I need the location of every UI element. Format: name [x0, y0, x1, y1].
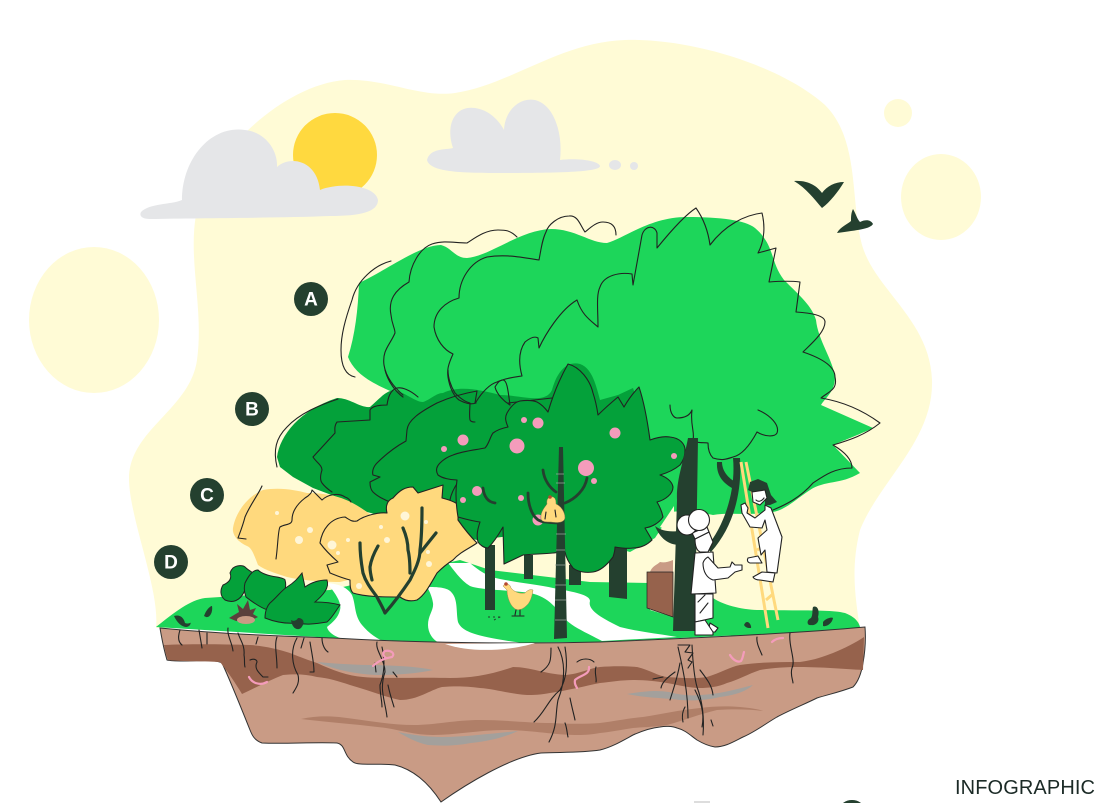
small pale blob: [884, 99, 912, 127]
peach tree: [437, 364, 685, 572]
bird two: [837, 209, 873, 233]
peach tree fruits: [441, 417, 677, 526]
label D: D: [164, 552, 178, 574]
cloud left: [140, 130, 378, 219]
label B: [235, 392, 269, 426]
label C: [190, 478, 224, 512]
left bushes: [221, 566, 340, 624]
label D: [154, 545, 188, 579]
dark green tree mass: [277, 363, 650, 540]
light green canopy: [348, 217, 873, 552]
soil grey veins: [317, 662, 753, 746]
yellow bush blossoms: [275, 511, 432, 589]
label B: B: [245, 400, 259, 420]
background blob: [129, 40, 932, 630]
ground hen: [503, 582, 533, 616]
label A: A: [304, 290, 318, 310]
cloud puff small: [630, 162, 638, 170]
label C: C: [200, 486, 214, 506]
chef: [677, 510, 742, 635]
yellow bush branches: [360, 508, 436, 613]
cropped grey marker: [694, 801, 710, 803]
white path left: [327, 583, 385, 642]
ground leaves: [174, 606, 833, 629]
left pale blob: [29, 247, 159, 393]
yellow front bush: [320, 485, 477, 601]
yellow back bushes: [233, 489, 430, 582]
birch tree: [483, 447, 587, 639]
earthworms: [249, 638, 783, 688]
ladder: [741, 462, 778, 628]
cloud puff large: [609, 160, 621, 170]
ground: [156, 560, 861, 643]
woman on ladder: [741, 479, 782, 582]
white path right: [448, 563, 677, 641]
sun: [293, 113, 377, 197]
yellow bush outlines: [238, 486, 351, 559]
right pale blob: [901, 154, 981, 240]
label A: [294, 282, 328, 316]
crate: [647, 560, 673, 617]
light canopy outlines: [341, 208, 880, 510]
white path middle: [427, 587, 530, 644]
white gap in soil: [445, 643, 535, 650]
soil mid band: [301, 706, 763, 735]
cloud right: [427, 100, 600, 173]
hen on branch: [541, 495, 565, 523]
back tree outlines: [275, 370, 552, 502]
roots: [179, 628, 793, 742]
soil dark band: [164, 637, 864, 700]
cream sliver by trunk: [660, 506, 674, 532]
hedgehog: [229, 600, 258, 624]
main trunks: [655, 438, 740, 631]
bird one: [794, 181, 844, 208]
seeds: [488, 616, 502, 620]
soil: [160, 627, 865, 802]
back trunks: [485, 545, 627, 610]
cropped marker: [840, 800, 864, 803]
watermark title: INFOGRAPHIC: [955, 777, 1095, 799]
